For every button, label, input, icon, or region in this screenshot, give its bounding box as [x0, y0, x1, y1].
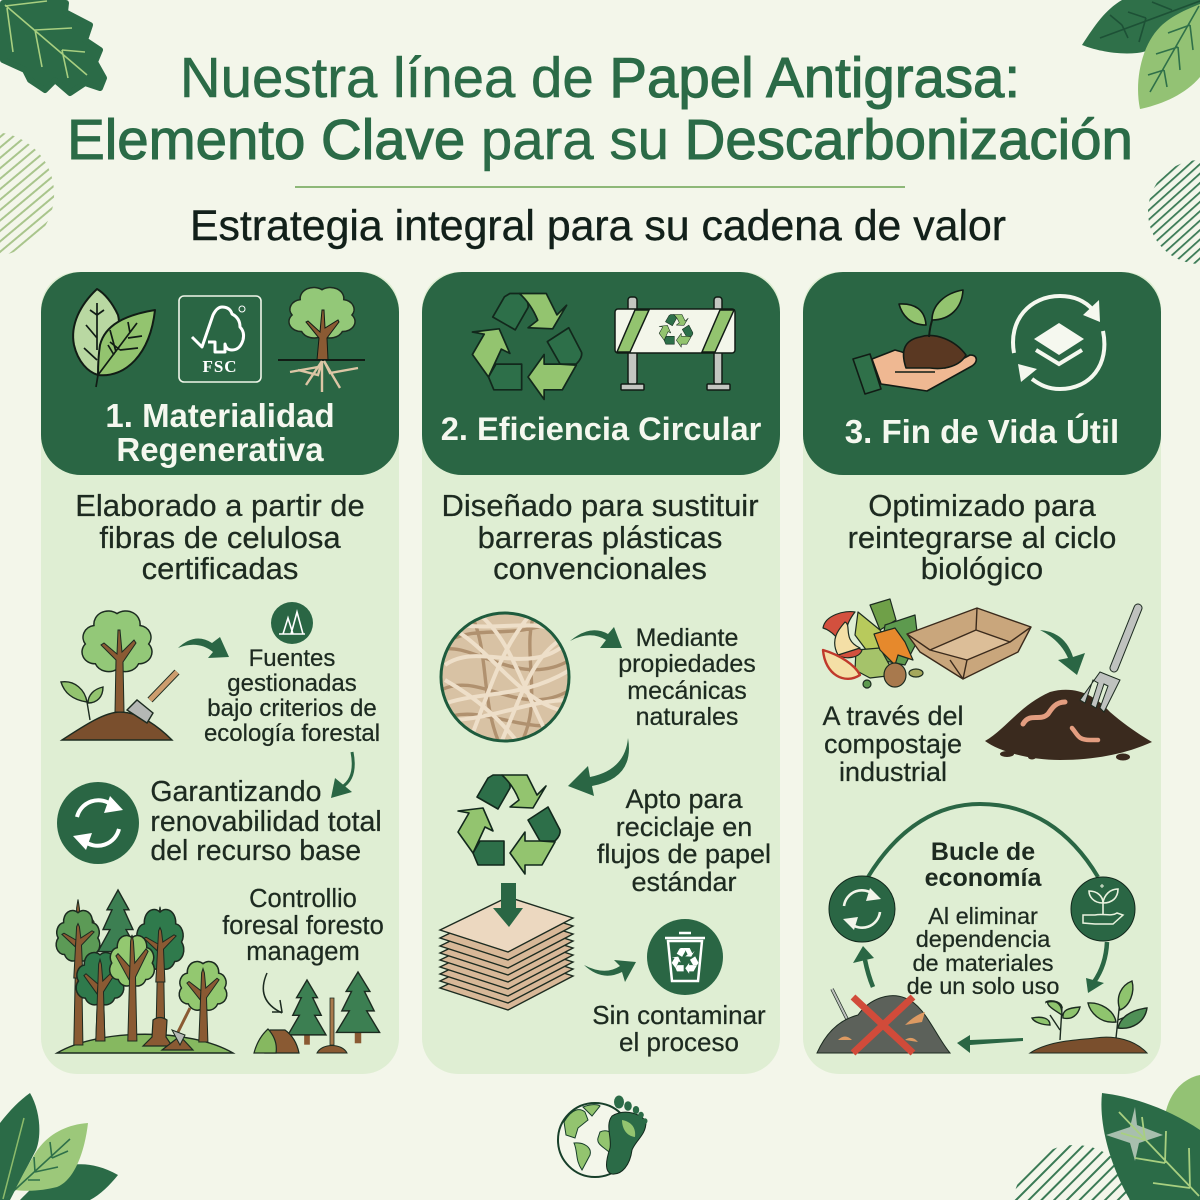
hatch circle left [0, 132, 54, 256]
text: fuentes gestionadas: ecología forestal [204, 720, 380, 747]
heading 1: Regenerativa [116, 431, 324, 468]
text: propiedades [618, 624, 756, 731]
intro text 2: convencionales [493, 551, 707, 586]
icon: crossed-out waste [817, 989, 950, 1053]
text: apto: estándar [631, 866, 737, 896]
text: propiedades: Mediante [636, 624, 738, 652]
subtitle: Estrategia integral para su cadena de valor [190, 202, 1006, 250]
intro text 3 [848, 488, 1116, 586]
text: fuentes gestionadas: Fuentes [249, 645, 335, 672]
icon: hand-plant badge [1071, 877, 1135, 941]
corner: bottom-right leaves [1101, 1075, 1200, 1200]
title divider [295, 186, 905, 188]
icon: sapling with shovel [61, 611, 177, 740]
text: bucle de economía: economía [925, 864, 1041, 892]
icon: kraft tray [907, 608, 1031, 679]
text: apto: Apto para [625, 784, 743, 814]
panel header: eficiencia [422, 272, 780, 475]
text: garantizando [150, 776, 382, 867]
icon: forest [56, 890, 233, 1053]
icon: recycle mid [458, 775, 560, 874]
icon: forest badge [271, 602, 313, 644]
icon: layers in cycle [1013, 296, 1104, 389]
intro text 1: fibras de celulosa [99, 520, 341, 554]
text: al eliminar: Al eliminar [928, 903, 1038, 929]
heading 1: 1. Materialidad [105, 397, 335, 434]
text: al eliminar: de materiales [912, 950, 1054, 976]
panel: eficiencia [422, 272, 780, 1074]
text: propiedades: propiedades [618, 650, 756, 678]
text: controllio: managem [246, 938, 360, 966]
icon: FSC logo [179, 296, 261, 382]
arrow down [493, 883, 523, 927]
text: garantizando: del recurso base [150, 835, 361, 867]
title [67, 46, 1133, 172]
text: controllio: foresal foresto [222, 912, 384, 940]
icon: cycle badge [829, 876, 895, 942]
text: al eliminar [907, 903, 1059, 999]
icon: fibre circle [441, 612, 570, 745]
text: bucle de economía [925, 838, 1042, 892]
arrow [853, 946, 874, 987]
arrow [957, 1035, 1023, 1053]
arrow [178, 637, 229, 658]
icon: leaves [73, 289, 155, 387]
text: sin contaminar: Sin contaminar [592, 1000, 766, 1030]
icon: FSC logo: FSC [202, 357, 238, 376]
arrow [584, 960, 636, 982]
title: Elemento Clave para su Descarbonización [67, 108, 1133, 171]
hatch circle right [1148, 160, 1200, 264]
icon: tree with roots [278, 287, 365, 392]
arrow [263, 973, 282, 1013]
corner: top-left leaf [3, 1, 104, 93]
text: propiedades: mecánicas [627, 677, 747, 705]
icon: renew badge [57, 782, 139, 864]
arrow [1086, 942, 1107, 993]
intro text 1: certificadas [142, 551, 298, 586]
text: compostaje [822, 701, 964, 787]
text: garantizando: renovabilidad total [150, 806, 382, 838]
icon: globe with footprint [558, 1096, 648, 1177]
panel header: materialidad [41, 272, 399, 475]
icon: pines with logs [254, 972, 380, 1053]
hatch circle bottom [1013, 1145, 1137, 1200]
text: apto [597, 784, 771, 896]
intro text 1: Elaborado a partir de [75, 488, 365, 523]
title: Nuestra línea de Papel Antigrasa: [180, 46, 1020, 109]
text: sin contaminar [592, 1000, 766, 1057]
intro text 2 [441, 488, 759, 586]
intro text 3: Optimizado para [868, 488, 1096, 523]
icon: hand with soil and sprout [853, 290, 976, 394]
text: fuentes gestionadas: gestionadas [227, 670, 357, 697]
icon: compost with fork [985, 608, 1152, 760]
corner: top-right leaves [1082, 0, 1200, 109]
text: compostaje: industrial [839, 757, 947, 787]
text: controllio: Controllio [249, 885, 357, 913]
icon: barrier [615, 297, 735, 390]
icon: seedlings [1030, 981, 1147, 1053]
text: apto: reciclaje en [616, 812, 752, 842]
text: compostaje: compostaje [824, 729, 962, 759]
panel: materialidad [41, 272, 399, 1074]
text: compostaje: A través del [822, 701, 964, 731]
text: al eliminar: dependencia [916, 926, 1050, 952]
loop arc [868, 804, 1098, 877]
text: fuentes gestionadas: bajo criterios de [207, 695, 377, 722]
heading 2: 2. Eficiencia Circular [441, 410, 761, 447]
text: propiedades: naturales [636, 703, 738, 731]
text: controllio [222, 885, 384, 966]
arrow [1040, 630, 1085, 675]
icon: paper stack [440, 897, 573, 1010]
panel: fin de vida [803, 272, 1161, 1074]
icon: recycling bin [647, 919, 723, 995]
text: al eliminar: de un solo uso [907, 973, 1059, 999]
text: fuentes gestionadas [204, 645, 380, 747]
panel header: fin de vida [803, 272, 1161, 475]
arrow [331, 752, 353, 798]
intro text 3: reintegrarse al ciclo [848, 520, 1116, 554]
text: apto: flujos de papel [597, 839, 771, 869]
intro text 3: biológico [921, 551, 1043, 586]
intro text 1 [75, 488, 365, 586]
arrow [568, 738, 629, 796]
heading 1 [105, 397, 335, 468]
intro text 2: Diseñado para sustituir [441, 488, 759, 523]
corner: bottom-left leaves [0, 1093, 118, 1200]
text: sin contaminar: el proceso [619, 1027, 739, 1057]
icon: recycle large [472, 294, 582, 399]
heading 3: 3. Fin de Vida Útil [845, 413, 1119, 450]
intro text 2: barreras plásticas [478, 520, 722, 554]
text: bucle de economía: Bucle de [931, 838, 1035, 866]
text: garantizando: Garantizando [150, 776, 321, 808]
icon: food scraps [823, 599, 923, 688]
arrow [570, 627, 622, 648]
